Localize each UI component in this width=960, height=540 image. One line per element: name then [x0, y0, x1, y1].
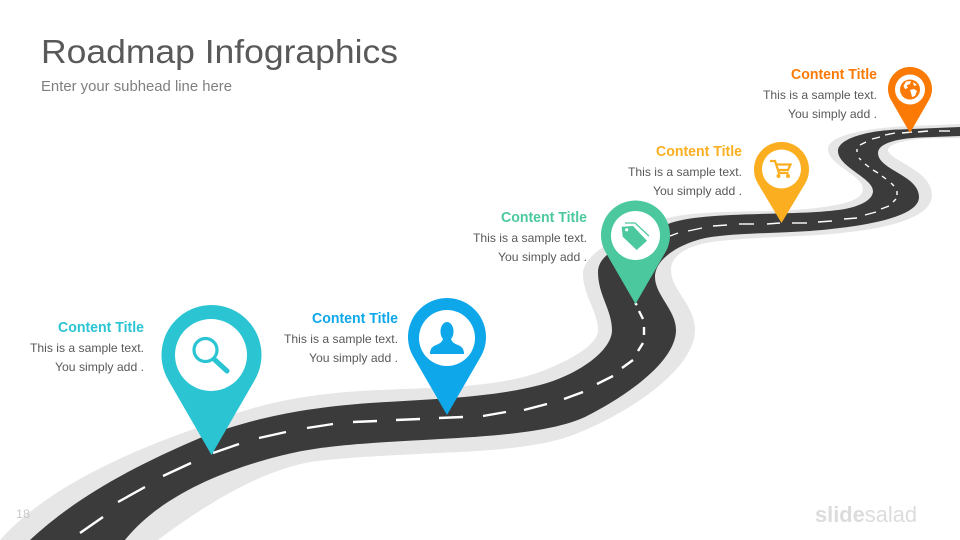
callout 5: This is a sample text.: [763, 88, 877, 102]
callout 2: Content Title: [312, 311, 398, 327]
icon: person: [430, 322, 464, 354]
icon: magnifier: [194, 338, 227, 371]
lane dashes: [80, 131, 950, 533]
road shoulder: [0, 124, 960, 540]
logo: slidesalad: [815, 502, 917, 527]
road surface: [30, 127, 960, 540]
pin 4: cart: [754, 142, 809, 223]
callout 2: This is a sample text.: [284, 332, 398, 346]
callout 5: You simply add .: [788, 107, 877, 121]
callout 3: This is a sample text.: [473, 231, 587, 245]
callout 3: Content Title: [501, 210, 587, 226]
callout 1: Content Title: [58, 320, 144, 336]
callout 1: You simply add .: [55, 360, 144, 374]
road with shoulder and lane dashes: [0, 124, 960, 540]
callout 5: [763, 67, 877, 121]
callout 4: Content Title: [656, 144, 742, 160]
icon: globe: [900, 80, 920, 100]
page number: 18: [16, 507, 30, 521]
callout 1: [30, 320, 144, 374]
pin 1: search: [161, 305, 261, 455]
title: Roadmap Infographics: [41, 33, 398, 70]
pin 2: person: [408, 298, 486, 415]
subhead: Enter your subhead line here: [41, 79, 232, 95]
callout 5: Content Title: [791, 67, 877, 83]
callout 3: You simply add .: [498, 250, 587, 264]
callout 4: This is a sample text.: [628, 165, 742, 179]
icon: shopping cart: [770, 161, 790, 178]
pin 5: globe: [888, 67, 932, 133]
pin 3: tag: [601, 201, 670, 304]
callout 2: [284, 311, 398, 365]
callout 3: [473, 210, 587, 264]
callout 4: [628, 144, 742, 198]
callout 2: You simply add .: [309, 351, 398, 365]
callout 4: You simply add .: [653, 184, 742, 198]
icon: tag: [622, 223, 649, 250]
callout 1: This is a sample text.: [30, 341, 144, 355]
